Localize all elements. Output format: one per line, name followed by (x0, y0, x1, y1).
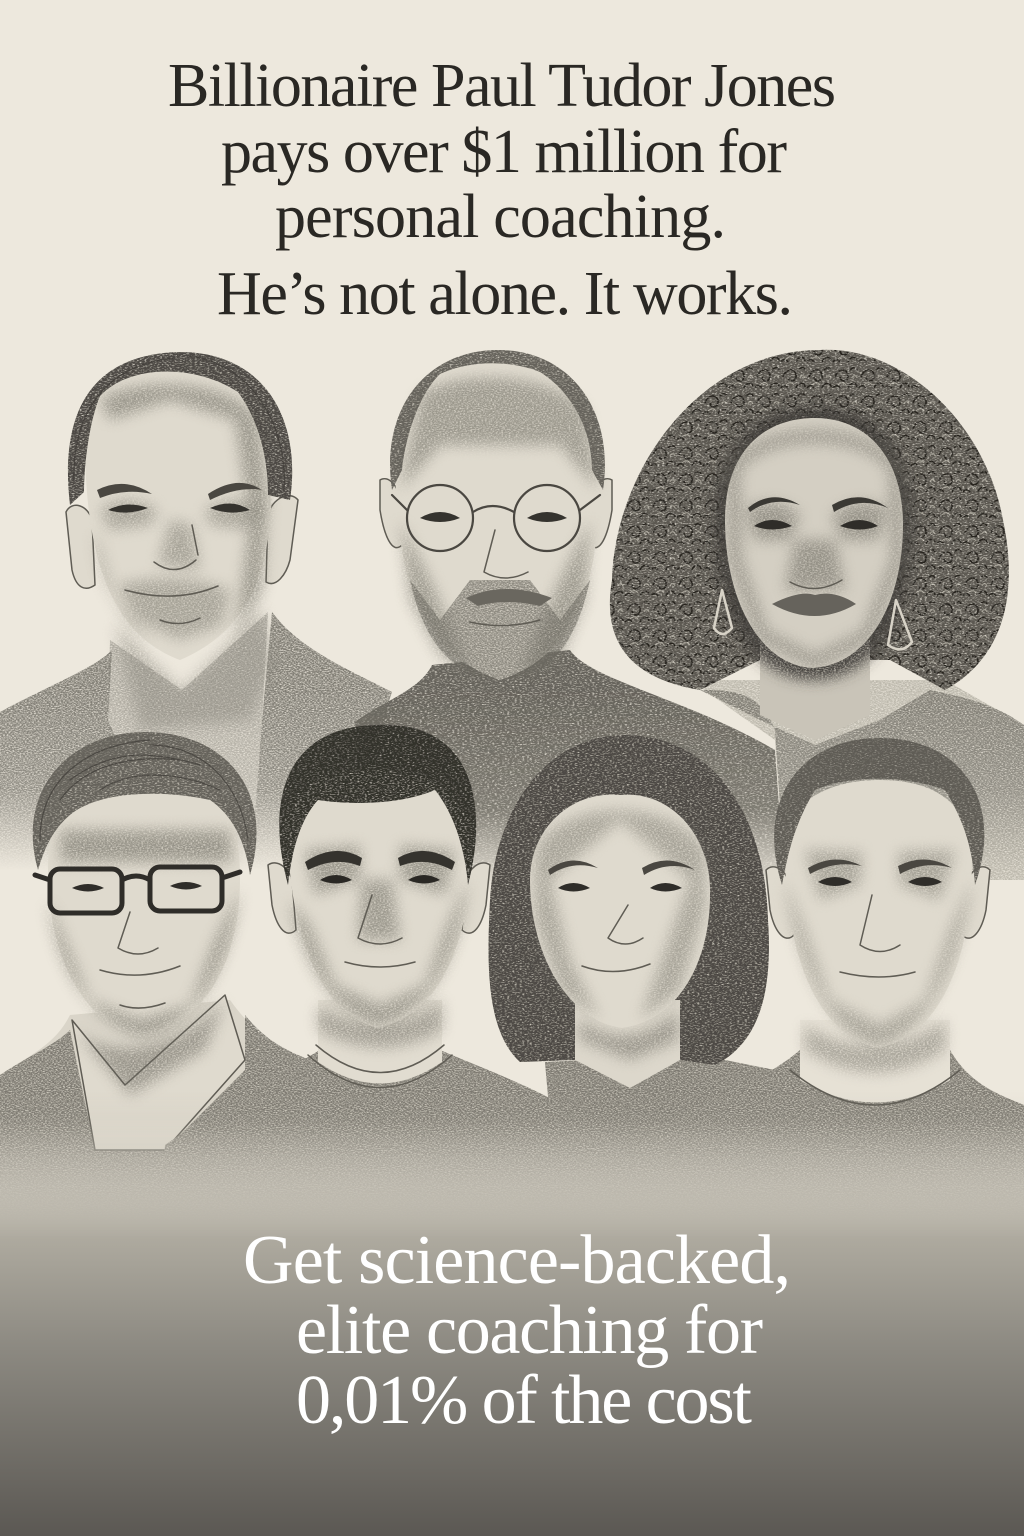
call to action: Get science-backed, (243, 1222, 791, 1299)
portrait: bottom left man in glasses and collared shirt (0, 732, 340, 1230)
headline (168, 52, 836, 251)
call to action (243, 1222, 791, 1439)
sketched portraits group (0, 350, 1024, 1235)
portrait: top left man in blazer (0, 352, 392, 880)
headline: personal coaching. (275, 183, 726, 251)
portrait: top right woman with curly hair (610, 350, 1024, 880)
call to action: elite coaching for (296, 1292, 763, 1369)
portrait: bottom centre-left man in dark jumper (164, 724, 622, 1204)
portrait: top centre man in round glasses (355, 350, 785, 890)
headline: pays over $1 million for (221, 118, 787, 186)
headline: Billionaire Paul Tudor Jones (168, 52, 836, 120)
call to action: 0,01% of the cost (296, 1362, 753, 1439)
portrait: bottom centre-right woman with shoulder-length hair (488, 735, 775, 1235)
subheading: He’s not alone. It works. (217, 260, 793, 328)
portrait: bottom right young man in sweater (635, 738, 1024, 1235)
bottom dark gradient (0, 1090, 1024, 1536)
